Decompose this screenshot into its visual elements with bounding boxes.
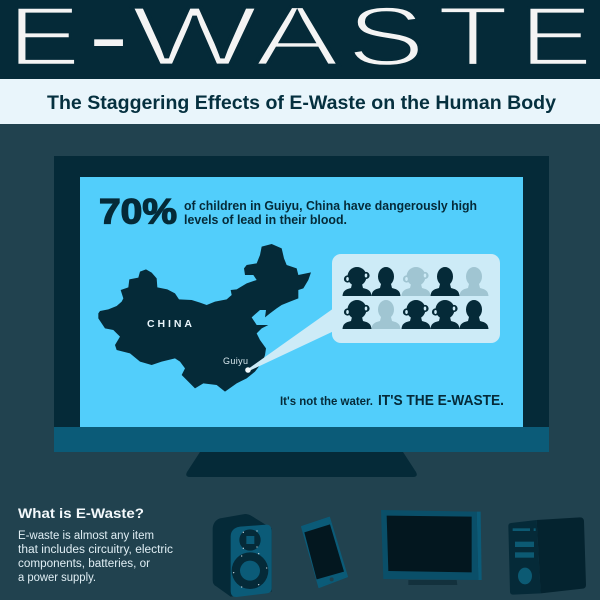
statistic description: levels of lead in their blood. <box>184 213 347 227</box>
tagline: IT'S THE E-WASTE. <box>378 392 504 409</box>
callout pointer <box>248 308 334 371</box>
map of China <box>98 244 311 392</box>
subtitle: The Staggering Effects of E-Waste on the Human Body <box>47 92 556 114</box>
map label: Guiyu: Guiyu <box>223 356 248 366</box>
header band <box>0 0 600 79</box>
tagline: It's not the water. <box>280 394 373 408</box>
description text <box>18 530 173 584</box>
monitor stand <box>186 452 417 477</box>
tagline <box>280 392 504 409</box>
description text: E-waste is almost any item <box>18 530 154 542</box>
title <box>8 0 592 83</box>
description text: a power supply. <box>18 572 96 584</box>
large monitor <box>54 156 549 477</box>
monitor chin <box>54 427 549 452</box>
monitor frame <box>54 156 549 427</box>
children icons <box>342 267 488 329</box>
statistic: 70%: 70% <box>99 192 177 232</box>
callout bubble <box>332 254 500 343</box>
statistic description <box>184 199 477 227</box>
map label: China: CHINA <box>147 318 192 330</box>
icon: desktop tower <box>508 517 586 595</box>
location dot: Guiyu <box>245 367 251 373</box>
icon: smartphone <box>302 517 347 587</box>
subtitle band <box>0 79 600 124</box>
heading: What is E-Waste?: What is E-Waste? <box>18 505 144 521</box>
icon: speaker <box>213 514 272 597</box>
icon: flat-screen monitor <box>381 510 482 585</box>
statistic description: of children in Guiyu, China have dangerously high <box>184 199 477 213</box>
description text: components, batteries, or <box>18 558 150 570</box>
description text: that includes circuitry, electric <box>18 544 173 556</box>
monitor screen <box>80 177 523 427</box>
